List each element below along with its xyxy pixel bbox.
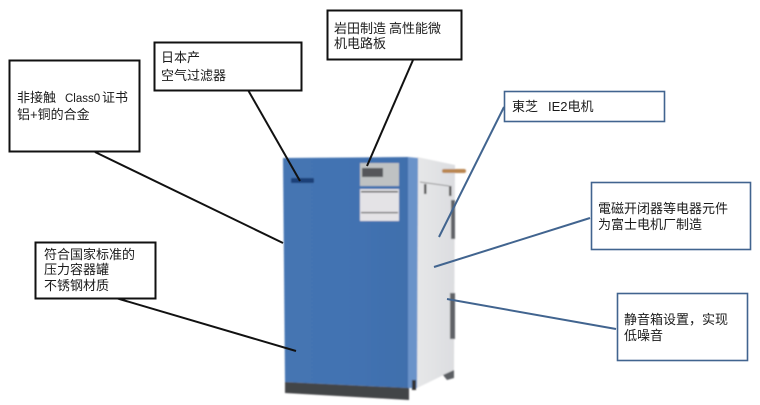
leader line: circuit board: [367, 60, 413, 166]
machine base side: [443, 370, 454, 380]
callout: motor: IE2电机: [548, 99, 594, 114]
callout: circuit board: 高性能微: [389, 21, 441, 36]
callout: silencer: 静音箱设置，实现: [624, 312, 728, 327]
callout: air filter: [154, 42, 302, 90]
callout: circuit board: [328, 10, 462, 60]
callout: circuit board: 机电路板: [334, 36, 386, 51]
leader line: pressure vessel: [116, 298, 296, 351]
callout: Class0 certificate: Class0: [65, 93, 100, 105]
callout: pressure vessel: [36, 242, 156, 298]
callout: motor: [504, 92, 664, 122]
lower vent: [450, 293, 455, 339]
specification plate: [360, 189, 399, 221]
machine base front: [285, 382, 409, 400]
callout: electrical components: 電磁开闭器等电器元件: [598, 201, 728, 216]
callout: air filter: 日本产: [161, 50, 200, 65]
control panel: [360, 163, 399, 186]
callout: electrical components: [592, 182, 750, 250]
callout: motor: 東芝: [512, 99, 538, 114]
leader line: electrical components: [434, 218, 590, 267]
callout: pressure vessel: 不锈钢材质: [44, 278, 109, 293]
corner foot: [412, 380, 416, 390]
leader line: Class0 certificate: [95, 152, 283, 243]
control panel display: [362, 168, 383, 177]
compressor machine: [283, 157, 464, 400]
callout: Class0 certificate: 非接触: [17, 90, 56, 105]
leader line: silencer: [447, 299, 616, 329]
callout: air filter: 空气过滤器: [161, 68, 226, 83]
callout: pressure vessel: 压力容器罐: [44, 262, 109, 277]
leader line: air filter: [248, 90, 300, 181]
callout: pressure vessel: 符合国家标准的: [44, 247, 135, 262]
machine side panel: [417, 157, 455, 388]
upper vent: [451, 200, 455, 239]
callout: Class0 certificate: 证书: [102, 90, 128, 105]
callout: silencer: 低噪音: [624, 328, 663, 343]
side panel door outline: [420, 182, 449, 186]
copper pipe: [444, 169, 464, 173]
leader line: motor: [439, 107, 504, 237]
callout: circuit board: 岩田制造: [334, 21, 386, 36]
callout: silencer: [618, 294, 748, 360]
machine blue corner strip: [408, 157, 418, 388]
callout: Class0 certificate: [10, 60, 140, 152]
brand logo badge: [291, 178, 314, 183]
callout: Class0 certificate: 铝+铜的合金: [17, 107, 90, 122]
specification plate bars: [361, 191, 398, 213]
machine front panel: [283, 157, 408, 388]
side door latches: [424, 184, 452, 196]
callout: electrical components: 为富士电机厂制造: [598, 217, 702, 232]
